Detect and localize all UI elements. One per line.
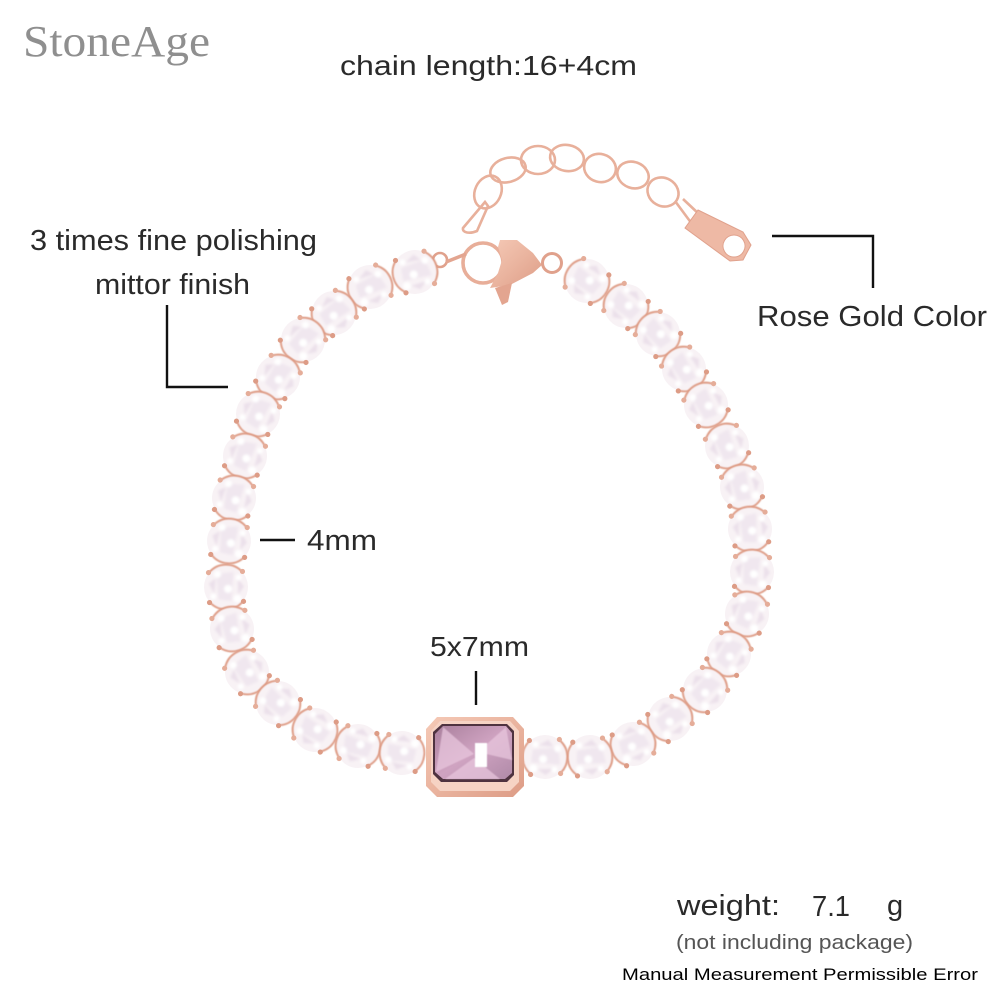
weight info: 7.1: [812, 891, 850, 923]
callout: 5x7mm centre stone size: 5x7mm: [430, 631, 529, 662]
weight info: g: [887, 890, 903, 922]
note: measurement error: Manual Measurement Permissible Error: [622, 965, 978, 984]
callout: rose gold color: Rose Gold Color: [757, 301, 987, 333]
bracelet illustration: [203, 142, 775, 797]
round zirconia stones: [203, 244, 775, 782]
pink centre gem: [426, 717, 524, 797]
note: not including package: (not including package): [676, 932, 913, 954]
callout: 4mm stone size: [260, 525, 377, 557]
callout: polishing finish: mittor finish: [95, 269, 250, 301]
heading: chain length: chain length:16+4cm: [340, 50, 637, 81]
extender tag: [685, 210, 751, 261]
callout: polishing finish: [30, 225, 317, 387]
lobster clasp: [433, 240, 562, 305]
callout: 5x7mm centre stone size: [430, 631, 529, 705]
extender chain: [463, 142, 700, 233]
logo: StoneAge: StoneAge: [23, 17, 210, 66]
weight info: weight:: [676, 890, 780, 922]
weight info: [676, 890, 903, 923]
callout: 4mm stone size: 4mm: [307, 525, 377, 557]
callout: rose gold color: [757, 236, 987, 333]
callout: polishing finish: 3 times fine polishing: [30, 225, 317, 257]
